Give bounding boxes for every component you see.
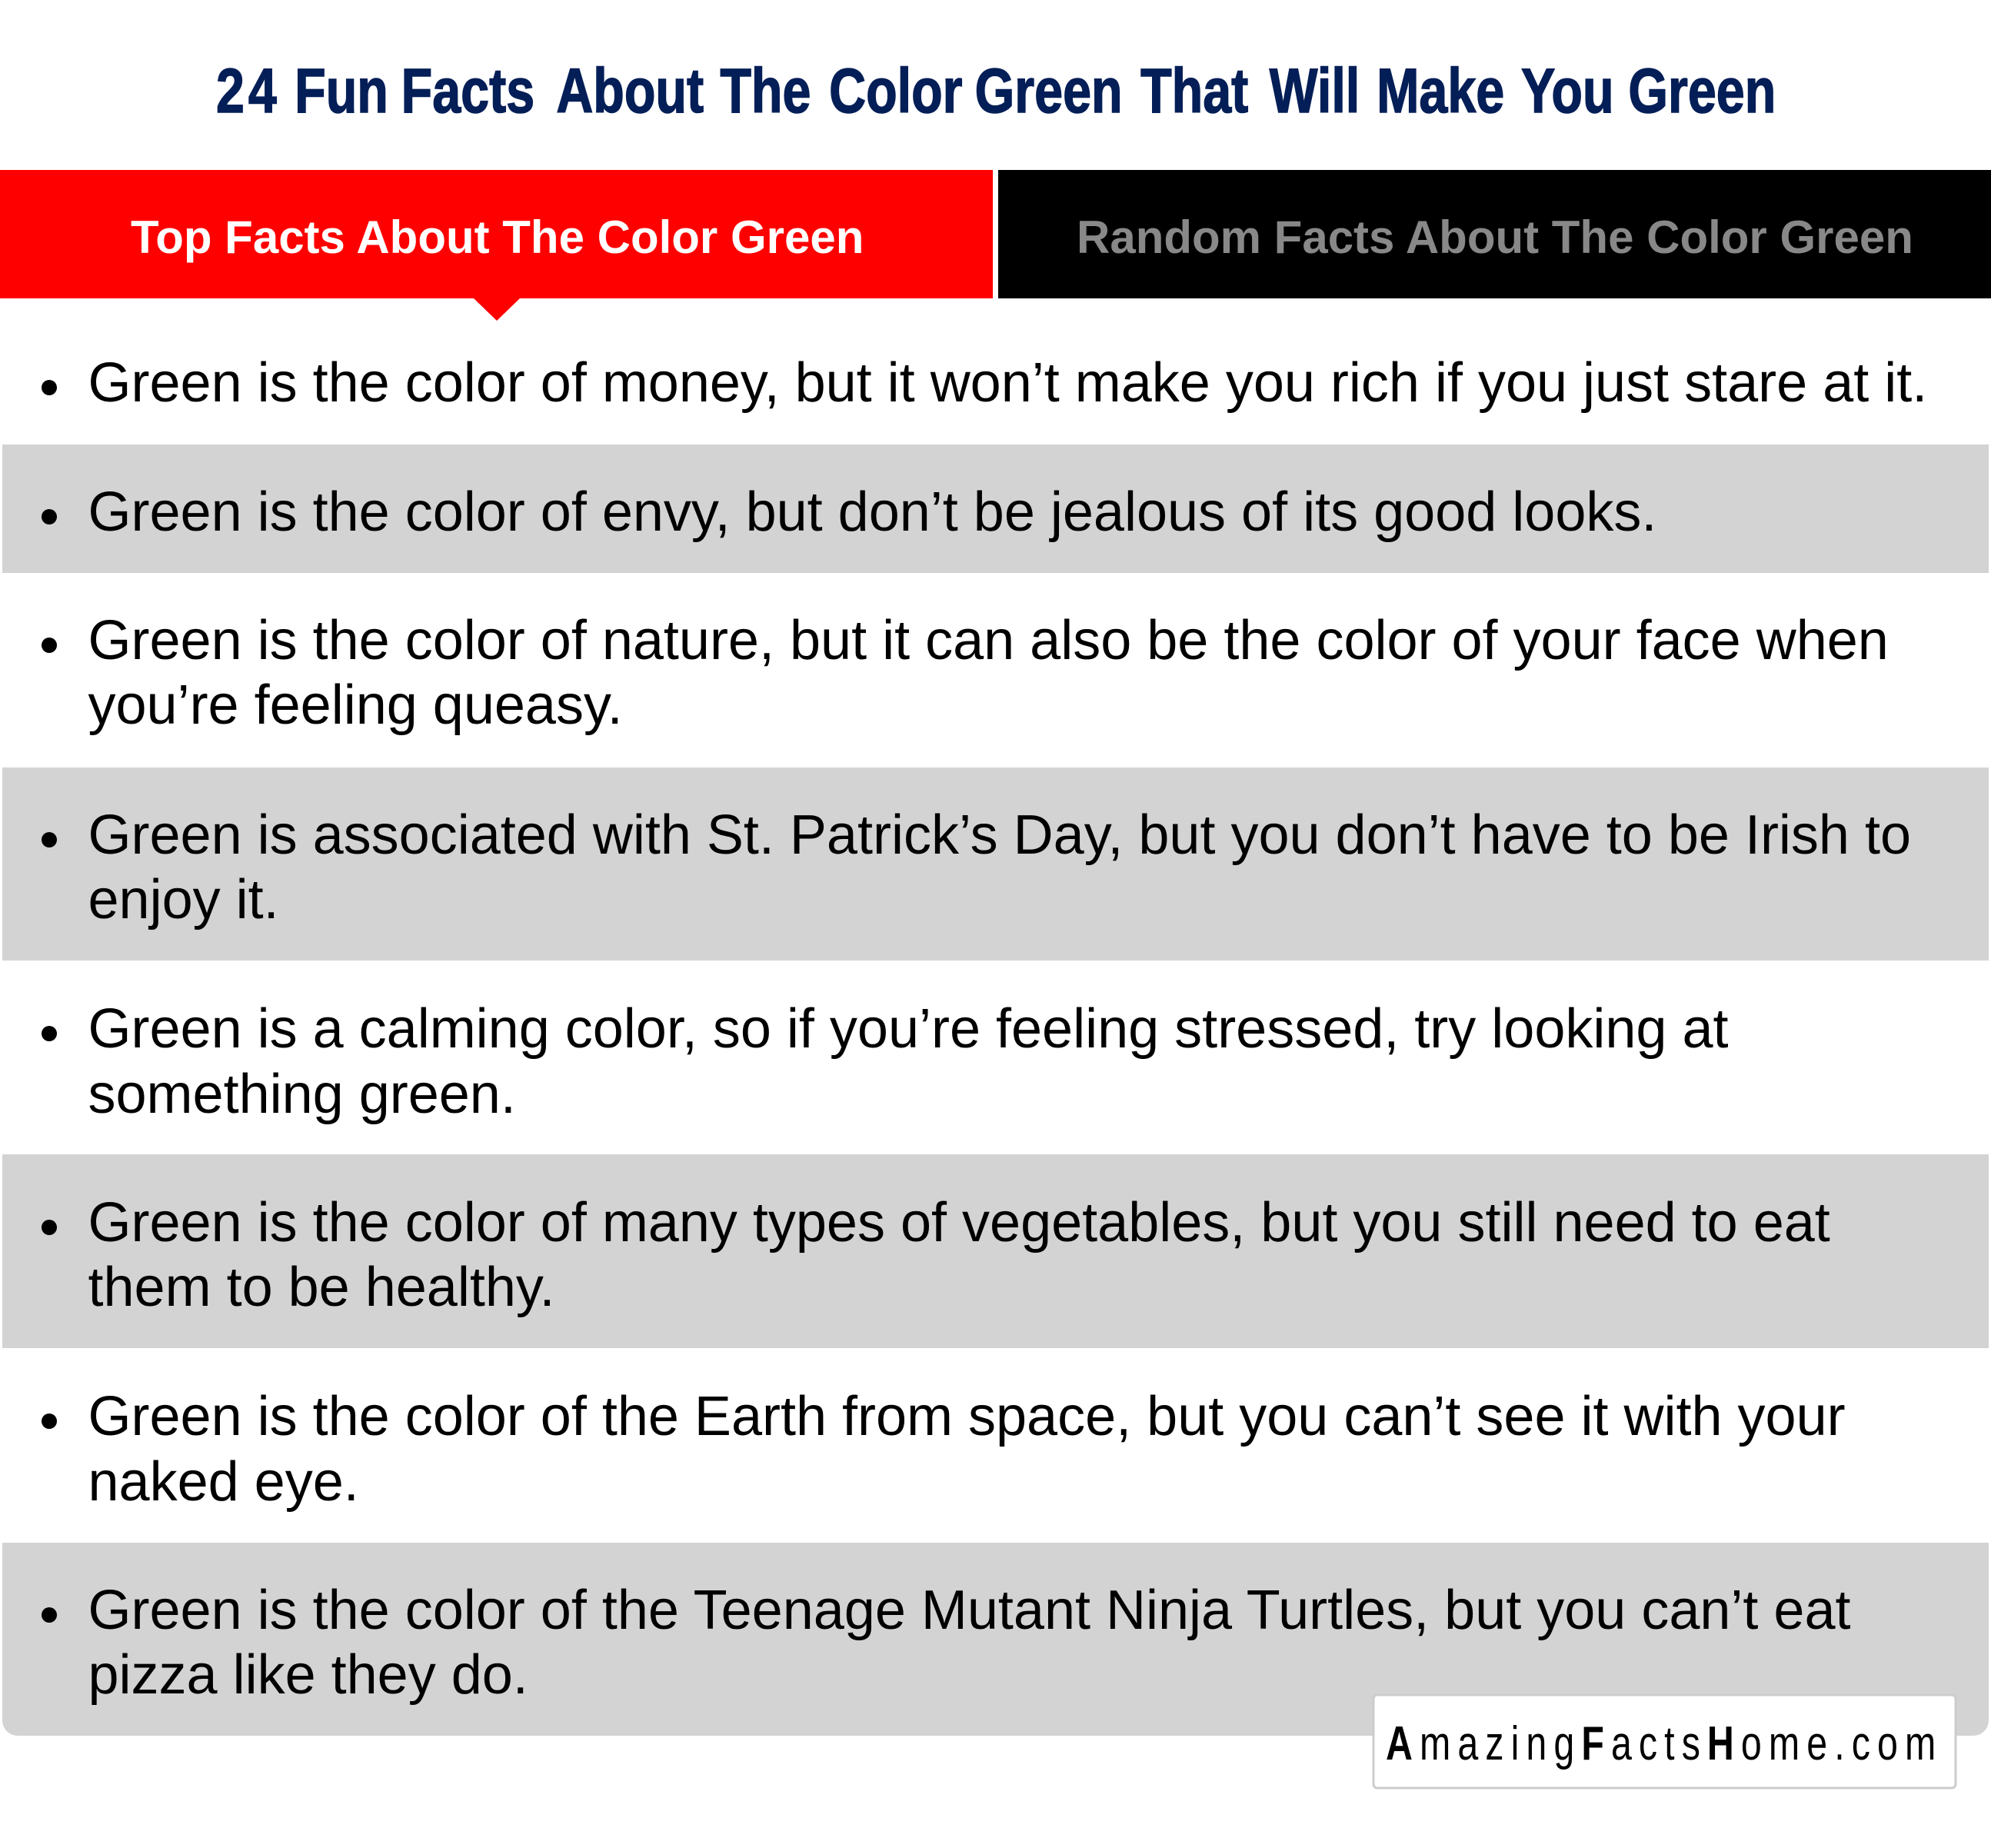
fact 6 row: them to be healthy. [88, 1257, 555, 1318]
fact 2 row: Green is the color of envy, but don’t be jealous of its good looks. [88, 481, 1656, 543]
tab: top facts (active) [0, 170, 993, 321]
fact 6 row: Green is the color of many types of vegetables, but you still need to eat [88, 1192, 1830, 1254]
fact 3 row: Green is the color of nature, but it can also be the color of your face when [88, 610, 1889, 671]
tab: random facts (inactive) [998, 170, 1991, 298]
title: Green [975, 55, 1123, 126]
title: That [1140, 55, 1248, 126]
fact 4 row [2, 768, 1989, 961]
fact 8 row: pizza like they do. [88, 1644, 528, 1706]
fact 5 row: something green. [88, 1064, 516, 1125]
fact 8 row [2, 1543, 1989, 1736]
watermark badge: AmazingFactsHome.com [1386, 1716, 1936, 1770]
fact 1 row: Green is the color of money, but it won’t make you rich if you just stare at it. [88, 352, 1927, 414]
fact 8 row: Green is the color of the Teenage Mutant Ninja Turtles, but you can’t eat [88, 1580, 1851, 1641]
fact 7 row [42, 1386, 1846, 1513]
title: Will [1270, 55, 1360, 126]
title: 24 [216, 55, 281, 126]
fact 4 row: Green is associated with St. Patrick’s Day, but you don’t have to be Irish to [88, 804, 1911, 866]
tab: random facts (inactive): Random Facts About The Color Green [1077, 211, 1913, 263]
title: You [1521, 55, 1614, 126]
fact 3 row [42, 610, 1889, 736]
title: The [720, 55, 811, 126]
fact 2 row [2, 445, 1989, 573]
fact 5 row: Green is a calming color, so if you’re feeling stressed, try looking at [88, 998, 1729, 1060]
title: Green [1628, 55, 1776, 126]
fact 7 row: Green is the color of the Earth from space, but you can’t see it with your [88, 1386, 1846, 1447]
fact 4 row: enjoy it. [88, 869, 279, 931]
watermark badge [1373, 1695, 1956, 1788]
fact 3 row: you’re feeling queasy. [88, 674, 623, 736]
fact 6 row [2, 1154, 1989, 1348]
title: About [556, 55, 704, 126]
fact 5 row [42, 998, 1729, 1125]
title: Color [829, 55, 963, 126]
title: Facts [401, 55, 534, 126]
title: Fun [295, 55, 388, 126]
tab: top facts (active): Top Facts About The Color Green [131, 211, 864, 263]
fact 7 row: naked eye. [88, 1451, 359, 1513]
title: Make [1377, 55, 1504, 126]
